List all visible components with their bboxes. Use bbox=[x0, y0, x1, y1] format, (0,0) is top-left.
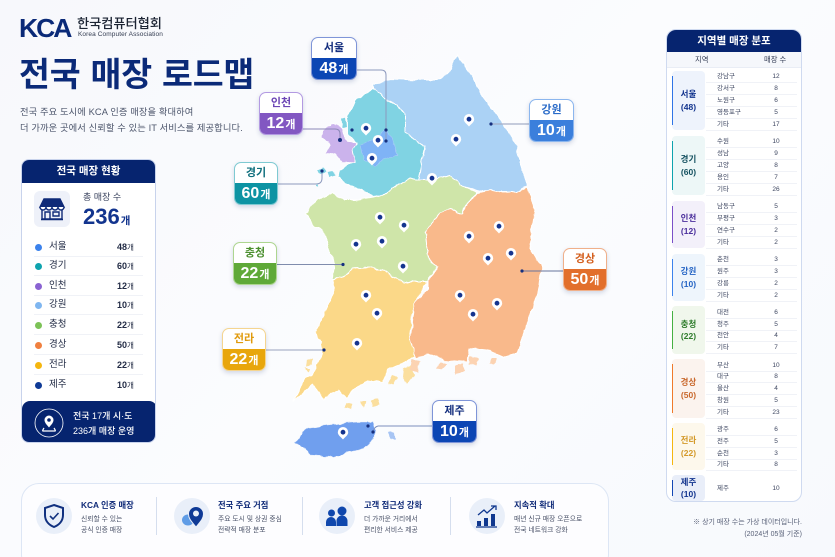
rows: 경기: 용인 bbox=[717, 174, 729, 181]
rows: 서울: 5 bbox=[774, 109, 778, 116]
callout: 충청 bbox=[233, 242, 277, 285]
connector: 충청 bbox=[277, 263, 345, 266]
region: 인천: (12) bbox=[681, 226, 696, 236]
callout: 경기: 개 bbox=[260, 188, 270, 200]
region: 제주: (10) bbox=[681, 489, 696, 499]
rows: 전라: 8 bbox=[774, 461, 778, 468]
region: 전라 bbox=[672, 423, 705, 470]
region: 강원: (10) bbox=[681, 278, 696, 288]
rows: 인천: 기타 bbox=[717, 239, 729, 246]
rows: 강원: 3 bbox=[774, 268, 778, 275]
icon: location pin bbox=[34, 408, 64, 438]
rows: 강원: 원주 bbox=[717, 268, 729, 275]
rows: 경기: 8 bbox=[774, 162, 778, 169]
rows: 전라: 6 bbox=[774, 426, 778, 433]
intro text: 더 가까운 곳에서 신뢰할 수 있는 IT 서비스를 제공합니다. bbox=[20, 122, 243, 132]
callout: 제주: 10 bbox=[440, 422, 458, 440]
table column headers bbox=[667, 52, 803, 68]
rows: 경기: 기타 bbox=[717, 186, 729, 193]
row: 인천: 인천 bbox=[49, 280, 66, 291]
rows: 전라: 광주 bbox=[717, 426, 729, 433]
row: 경기 bbox=[34, 260, 143, 276]
callout: 전라 bbox=[222, 328, 266, 371]
total store count bbox=[83, 192, 130, 229]
rows: 경기: 7 bbox=[774, 174, 778, 181]
callout: 서울: 서울 bbox=[324, 42, 344, 54]
rows: 서울: 강남구 bbox=[717, 73, 735, 80]
islands: 경상 bbox=[410, 356, 496, 374]
feature: 지속적 확대: 매년 신규 매장 오픈으로 bbox=[514, 516, 582, 523]
callout: 강원 bbox=[529, 99, 574, 142]
rows: 경기: 고양 bbox=[717, 162, 729, 169]
feature: KCA 인증 매장: KCA 인증 매장 bbox=[81, 500, 134, 510]
callout: 전라: 22 bbox=[230, 350, 247, 368]
rows: 서울: 영등포구 bbox=[717, 109, 741, 116]
rows: 인천: 연수구 bbox=[717, 227, 735, 234]
rows: 충청: 청주 bbox=[717, 321, 729, 328]
callout: 전라: 개 bbox=[248, 354, 258, 366]
rows: 충청: 기타 bbox=[717, 344, 729, 351]
rows: 강원: 2 bbox=[774, 292, 778, 299]
panel heading: 전국 매장 현황 bbox=[57, 165, 120, 177]
total store count: 236개 bbox=[83, 204, 130, 229]
logo: KCA: KCA bbox=[19, 13, 70, 43]
region: 경기 bbox=[672, 136, 705, 195]
rows: 서울: 17 bbox=[772, 121, 780, 128]
region: 경기: 경기 bbox=[681, 154, 696, 164]
land regions bbox=[293, 56, 542, 457]
region: 강원: 강원 bbox=[681, 266, 696, 276]
region: 경상: (50) bbox=[681, 390, 696, 400]
footnote bbox=[693, 518, 802, 538]
feature: KCA 인증 매장 bbox=[36, 498, 134, 534]
total store count: 총 매장 수 bbox=[83, 192, 121, 202]
rows: 서울: 노원구 bbox=[717, 97, 735, 104]
callout: 경상: 경상 bbox=[575, 253, 595, 265]
callout: 강원: 개 bbox=[556, 126, 566, 138]
callout: 경상: 50 bbox=[571, 270, 588, 288]
region: 전라 bbox=[293, 267, 428, 402]
feature: 고객 접근성 강화 bbox=[319, 498, 422, 534]
rows: 경상: 5 bbox=[774, 397, 778, 404]
rows: 경상: 부산 bbox=[717, 362, 729, 369]
row: 전라: 전라 bbox=[49, 359, 66, 370]
connector: 제주 bbox=[366, 424, 432, 434]
rows: 충청: 4 bbox=[774, 332, 778, 339]
feature: 고객 접근성 강화: 더 가까운 거리에서 bbox=[364, 516, 418, 523]
callout: 충청: 개 bbox=[259, 268, 269, 280]
callout: 전라: 전라 bbox=[234, 333, 254, 345]
footnote: ※ 상기 매장 수는 가상 데이터입니다. bbox=[693, 519, 802, 526]
summary text bbox=[73, 411, 134, 436]
region: 경기 bbox=[337, 89, 425, 196]
region: 강원 bbox=[373, 56, 527, 193]
intro text bbox=[20, 107, 243, 132]
callout: 제주 bbox=[432, 400, 477, 443]
rows: 경상: 4 bbox=[774, 385, 778, 392]
row: 전라: 22개 bbox=[117, 360, 134, 370]
callout: 경상 bbox=[563, 248, 607, 291]
rows: 인천: 2 bbox=[774, 239, 778, 246]
connector: 경상 bbox=[520, 269, 563, 273]
feature: 지속적 확대 bbox=[469, 498, 582, 534]
region: 제주 bbox=[295, 422, 377, 457]
region: 경상 bbox=[672, 359, 705, 418]
logo: KCA: Korea Computer Association bbox=[78, 31, 163, 38]
rows: 서울: 강서구 bbox=[717, 85, 735, 92]
rows: 강원: 3 bbox=[774, 256, 778, 263]
rows: 서울: 기타 bbox=[717, 121, 729, 128]
region: 서울: (48) bbox=[681, 102, 696, 112]
row: 제주: 제주 bbox=[49, 379, 66, 390]
rows: 충청: 6 bbox=[774, 309, 778, 316]
row: 경상 bbox=[34, 338, 143, 355]
row: 경기: 60개 bbox=[117, 261, 134, 271]
rows: 경기: 10 bbox=[772, 138, 780, 145]
region: 서울: 서울 bbox=[681, 89, 696, 99]
rows: 충청: 5 bbox=[774, 321, 778, 328]
region: 제주 bbox=[672, 475, 705, 501]
rows: 경기: 성남 bbox=[717, 150, 729, 157]
rows: 제주: 제주 bbox=[717, 485, 729, 492]
callout: 인천: 인천 bbox=[271, 97, 291, 109]
rows: 서울: 8 bbox=[774, 85, 778, 92]
rows: 강원: 기타 bbox=[717, 292, 729, 299]
rows: 서울: 6 bbox=[774, 97, 778, 104]
feature: 전국 주요 거점: 전국 주요 거점 bbox=[218, 500, 268, 510]
feature: 고객 접근성 강화: 고객 접근성 강화 bbox=[364, 500, 422, 510]
feature: 고객 접근성 강화: 편리한 서비스 제공 bbox=[364, 527, 418, 534]
rows: 강원: 2 bbox=[774, 280, 778, 287]
callout: 경기: 60 bbox=[242, 184, 259, 202]
rows: 경상: 기타 bbox=[717, 409, 729, 416]
islands: 경기 bbox=[316, 116, 347, 187]
rows: 인천: 2 bbox=[774, 227, 778, 234]
connector: 서울 bbox=[357, 70, 388, 143]
rows: 경상: 창원 bbox=[717, 397, 729, 404]
region: 강원 bbox=[672, 254, 705, 301]
panel: 지역별 매장 분포 bbox=[666, 29, 802, 502]
region: 전라: (22) bbox=[681, 448, 696, 458]
rows: 경기 bbox=[706, 138, 797, 196]
region: 인천 bbox=[322, 123, 357, 162]
row: 서울: 서울 bbox=[49, 241, 66, 252]
summary footer bbox=[22, 401, 157, 444]
rows: 인천 bbox=[706, 202, 797, 249]
region: 충청 bbox=[305, 175, 477, 282]
rows: 전라: 5 bbox=[774, 438, 778, 445]
summary text: 236개 매장 운영 bbox=[73, 426, 134, 436]
callout: 제주: 제주 bbox=[444, 405, 465, 417]
row: 제주 bbox=[35, 378, 134, 390]
rows: 경기: 9 bbox=[774, 150, 778, 157]
rows: 전라: 전주 bbox=[717, 438, 729, 445]
feature: 지속적 확대: 전국 네트워크 강화 bbox=[514, 527, 568, 534]
row: 충청 bbox=[34, 318, 143, 335]
row: 경상: 경상 bbox=[49, 339, 66, 350]
rows: 경상: 10 bbox=[772, 362, 780, 369]
row: 강원 bbox=[34, 298, 143, 315]
callout: 강원: 강원 bbox=[541, 104, 562, 116]
row: 충청: 22개 bbox=[117, 320, 134, 330]
row: 경기: 경기 bbox=[49, 260, 66, 271]
table column headers: 지역 bbox=[695, 55, 708, 64]
rows: 충청 bbox=[706, 308, 797, 354]
region: 충청: (22) bbox=[681, 331, 696, 341]
logo: KCA: 한국컴퓨터협회 bbox=[77, 16, 162, 31]
title: 전국 매장 로드맵 bbox=[19, 57, 254, 94]
feature: KCA 인증 매장: 신뢰할 수 있는 bbox=[81, 516, 122, 523]
feature: 지속적 확대: 지속적 확대 bbox=[514, 500, 554, 510]
callout: 인천 bbox=[259, 92, 303, 135]
table heading: 지역별 매장 분포 bbox=[697, 35, 771, 47]
rows: 충청: 천안 bbox=[717, 332, 729, 339]
row: 강원: 강원 bbox=[49, 299, 66, 310]
callout: 제주: 개 bbox=[459, 426, 469, 438]
rows: 인천: 남동구 bbox=[717, 203, 735, 210]
rows: 충청: 대전 bbox=[717, 309, 729, 316]
feature: 전국 주요 거점: 전략적 매장 분포 bbox=[218, 527, 266, 534]
row: 서울 bbox=[34, 240, 143, 257]
panel: 전국 매장 현황 bbox=[21, 159, 156, 443]
row: 강원: 10개 bbox=[117, 300, 134, 310]
row: 인천: 12개 bbox=[117, 281, 134, 291]
rows: 전라: 기타 bbox=[717, 461, 729, 468]
callout: 서울: 개 bbox=[338, 64, 348, 76]
islands: 전라 bbox=[304, 358, 415, 410]
rows: 전라: 순천 bbox=[717, 450, 729, 457]
callout: 강원: 10 bbox=[537, 122, 555, 138]
rows: 경상: 8 bbox=[774, 373, 778, 380]
footnote: (2024년 05월 기준) bbox=[744, 531, 802, 538]
callout: 서울: 48 bbox=[320, 60, 337, 76]
rows: 전라 bbox=[706, 426, 797, 471]
rows: 인천: 3 bbox=[774, 215, 778, 222]
region: 충청 bbox=[672, 306, 705, 354]
rows: 강원: 강릉 bbox=[717, 280, 729, 287]
callout: 인천: 개 bbox=[285, 118, 295, 130]
connector: 전라 bbox=[266, 348, 326, 352]
rows: 경상 bbox=[706, 362, 797, 419]
region: 전라: 전라 bbox=[681, 435, 696, 445]
intro text: 전국 주요 도시에 KCA 인증 매장을 확대하여 bbox=[20, 107, 193, 117]
rows: 충청: 7 bbox=[774, 344, 778, 351]
region: 인천 bbox=[672, 201, 705, 248]
rows: 서울 bbox=[706, 72, 797, 131]
table column headers: 매장 수 bbox=[764, 55, 786, 64]
island: 우도 bbox=[388, 432, 394, 440]
region: 경기: (60) bbox=[681, 166, 696, 176]
callout: 충청: 충청 bbox=[245, 247, 265, 259]
region: 충청: 충청 bbox=[681, 318, 696, 328]
callout: 경기: 경기 bbox=[246, 167, 266, 179]
panel heading bbox=[22, 160, 155, 183]
region: 경상: 경상 bbox=[681, 377, 696, 387]
region: 경상 bbox=[410, 187, 542, 362]
icon: store bbox=[34, 191, 70, 227]
icon: people bbox=[319, 498, 355, 534]
row: 서울: 48개 bbox=[117, 242, 134, 252]
callout: 인천: 12 bbox=[267, 114, 284, 132]
callout: 경기 bbox=[234, 162, 278, 205]
row: 전라 bbox=[34, 358, 143, 375]
feature: 전국 주요 거점: 주요 도시 및 상권 중심 bbox=[218, 516, 282, 523]
icon: growth chart bbox=[469, 498, 505, 534]
rows: 경기: 수원 bbox=[717, 138, 729, 145]
rows: 경기: 26 bbox=[772, 186, 780, 193]
connector: 인천 bbox=[303, 128, 354, 142]
table heading bbox=[667, 30, 801, 52]
row: 충청: 충청 bbox=[49, 319, 66, 330]
store location pins bbox=[338, 114, 516, 440]
rows: 인천: 부평구 bbox=[717, 215, 735, 222]
icon: map pin bbox=[174, 498, 210, 534]
row: 제주: 10개 bbox=[117, 380, 134, 390]
callout: 충청: 22 bbox=[241, 264, 258, 282]
callout: 경상: 개 bbox=[589, 274, 599, 286]
icon: shield bbox=[36, 498, 72, 534]
rows: 강원: 춘천 bbox=[717, 256, 729, 263]
rows: 경상: 23 bbox=[772, 409, 780, 416]
row: 경상: 50개 bbox=[117, 340, 134, 350]
rows: 서울: 12 bbox=[772, 73, 780, 80]
callout: 서울 bbox=[311, 37, 357, 80]
row: 인천 bbox=[34, 280, 143, 296]
region: 인천: 인천 bbox=[681, 213, 696, 223]
connector: 경기 bbox=[278, 169, 324, 184]
summary text: 전국 17개 시·도 bbox=[73, 411, 132, 421]
rows: 제주: 10 bbox=[772, 485, 780, 492]
rows: 제주 bbox=[717, 484, 780, 492]
rows: 강원 bbox=[706, 256, 797, 302]
rows: 인천: 5 bbox=[774, 203, 778, 210]
region: 서울 bbox=[672, 71, 705, 130]
region: 서울 bbox=[360, 130, 398, 167]
region: 제주: 제주 bbox=[681, 476, 696, 486]
rows: 경상: 울산 bbox=[717, 385, 729, 392]
panel: 특징 bbox=[21, 483, 609, 557]
rows: 경상: 대구 bbox=[717, 373, 729, 380]
rows: 전라: 3 bbox=[774, 450, 778, 457]
feature: 전국 주요 거점 bbox=[174, 498, 282, 534]
logo: KCA bbox=[19, 13, 163, 43]
connector: 강원 bbox=[489, 122, 529, 126]
feature: KCA 인증 매장: 공식 인증 매장 bbox=[81, 527, 122, 534]
